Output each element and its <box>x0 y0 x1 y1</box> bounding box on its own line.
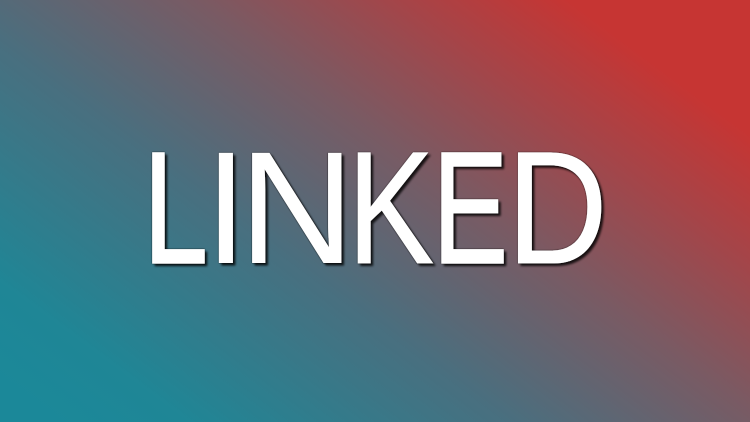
heading: LINKED: D <box>507 118 608 297</box>
heading: LINKED: E <box>433 120 508 297</box>
heading: LINKED: N <box>239 118 355 297</box>
heading: LINKED: I <box>205 118 247 297</box>
heading: LINKED <box>144 118 608 297</box>
heading: LINKED: L <box>144 121 208 297</box>
heading: LINKED: K <box>348 118 434 297</box>
